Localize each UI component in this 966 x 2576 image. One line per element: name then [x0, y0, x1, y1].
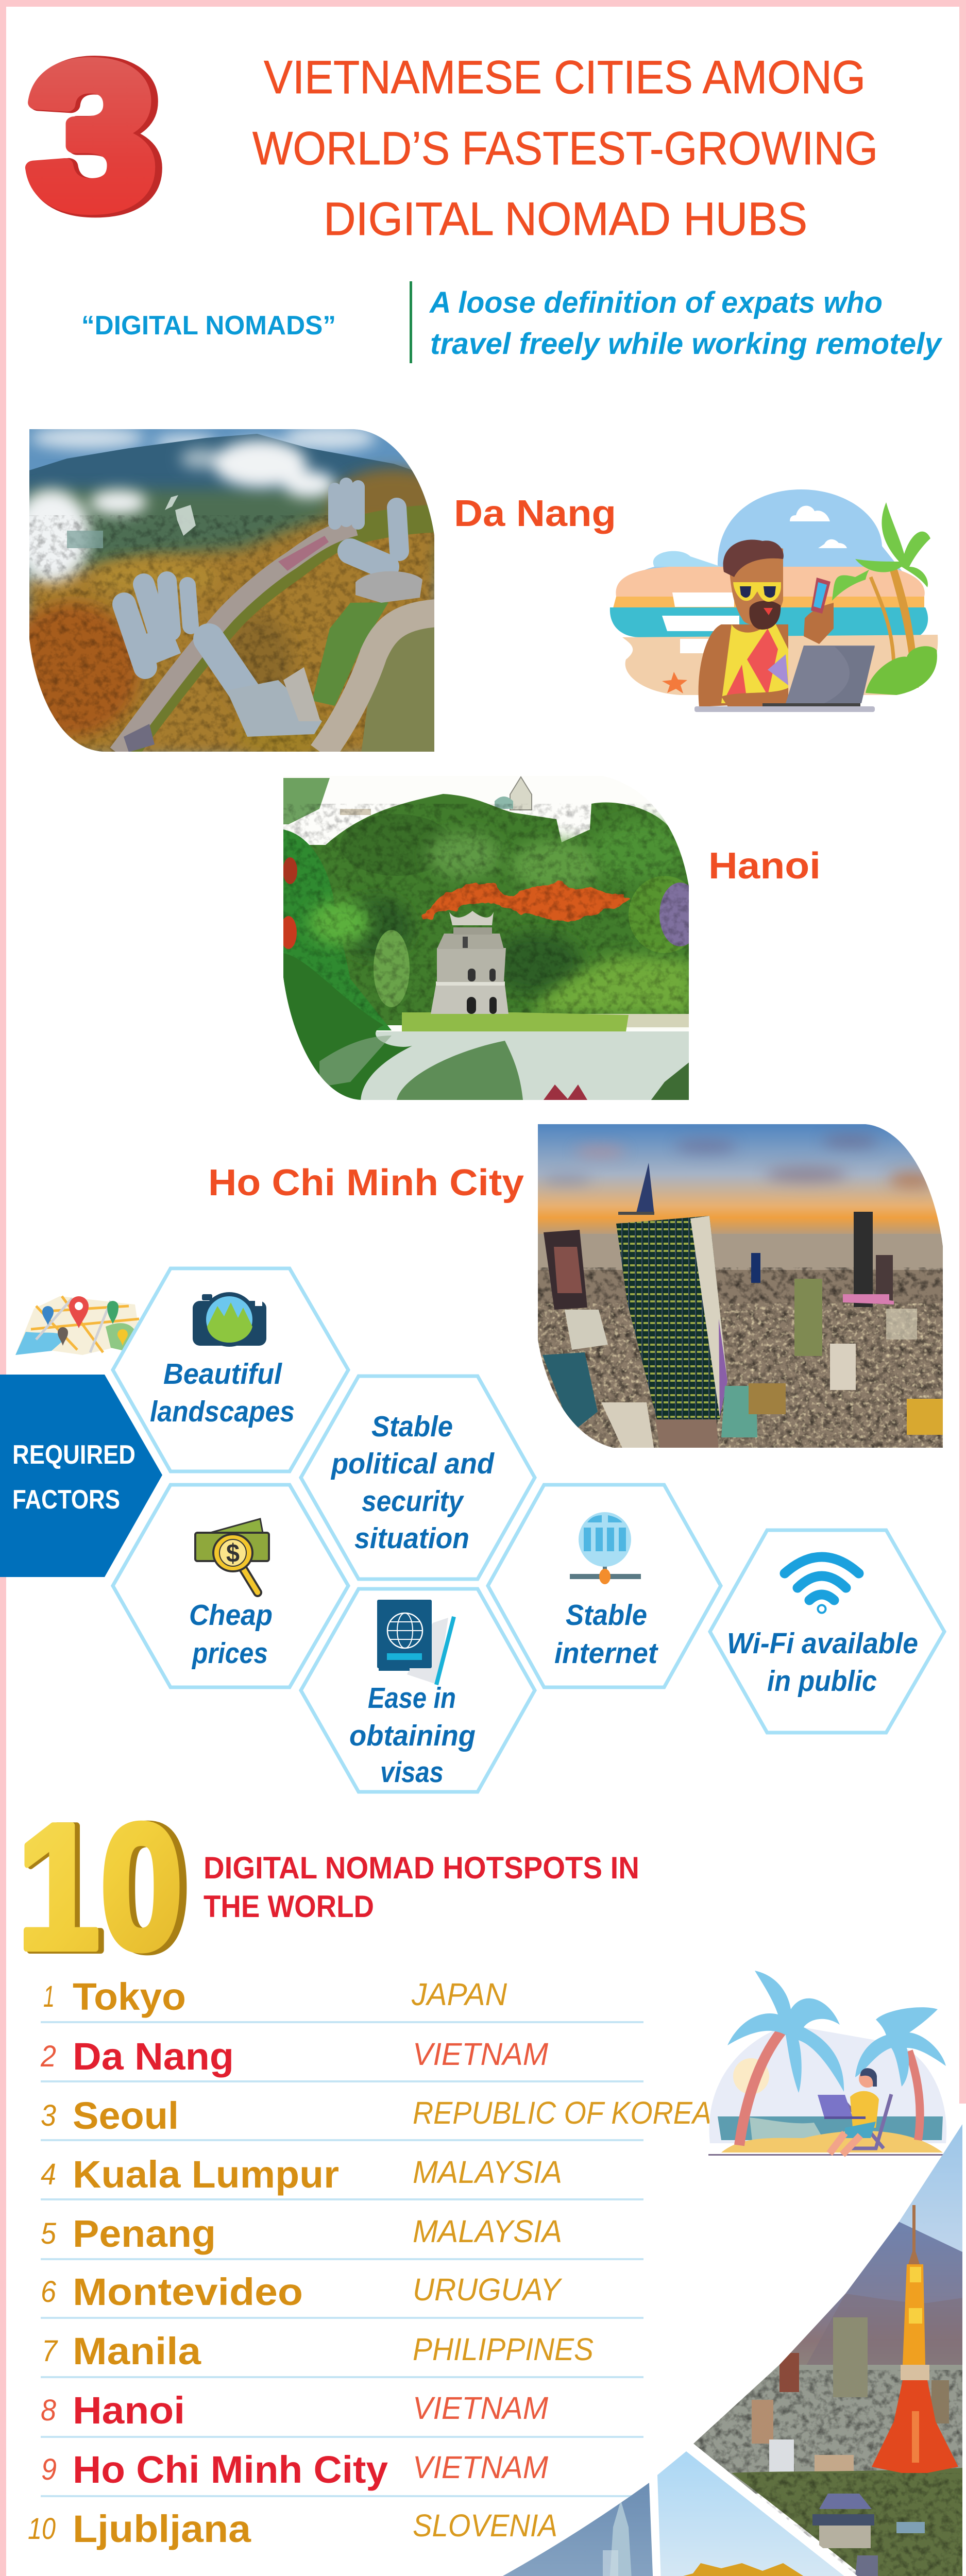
- label: Da Nang: Da Nang: [454, 493, 616, 534]
- row 8: VIETNAM: [413, 2391, 548, 2426]
- row 3: Seoul: [73, 2094, 179, 2137]
- row 6: URUGUAY: [413, 2272, 563, 2307]
- arrow: required factors: REQUIRED: [12, 1440, 135, 1470]
- flame trees: [425, 882, 630, 920]
- row 5: MALAYSIA: [413, 2214, 562, 2249]
- illustration: city map with pins: [15, 1296, 143, 1355]
- hexagon: ease in obtaining visas: obtaining: [349, 1719, 476, 1752]
- photo: Hanoi Turtle Tower: [280, 773, 701, 1104]
- row 10: [28, 2507, 557, 2550]
- photo collage: ten cities: [503, 2124, 962, 2576]
- row 1: Tokyo: [73, 1975, 186, 2018]
- heading: hotspots: DIGITAL NOMAD HOTSPOTS IN: [204, 1851, 639, 1885]
- definition text: travel freely while working remotely: [430, 327, 943, 361]
- man: [699, 540, 834, 708]
- row 4: [41, 2153, 643, 2200]
- illustration: nomad man on beach: [610, 489, 938, 712]
- row 7: PHILIPPINES: [413, 2332, 594, 2367]
- temple: [812, 2494, 925, 2576]
- hexagon: wi-fi available in public: [710, 1530, 944, 1733]
- row 8: 8: [41, 2394, 56, 2427]
- row 4: Kuala Lumpur: [73, 2153, 339, 2196]
- hexagon: wi-fi available in public: Wi-Fi available: [727, 1627, 918, 1660]
- row 1: 1: [43, 1980, 55, 2013]
- arrow: required factors: FACTORS: [12, 1485, 120, 1515]
- hexagon: beautiful landscapes: landscapes: [150, 1395, 295, 1428]
- walkway: [322, 613, 438, 753]
- row 7: [41, 2330, 643, 2378]
- purple tree: [629, 876, 687, 953]
- row 9: [41, 2448, 643, 2497]
- photo: Da Nang dragon bridge: [654, 2447, 938, 2576]
- row 8: Hanoi: [73, 2389, 185, 2432]
- row 9: Ho Chi Minh City: [73, 2448, 388, 2491]
- hexagon: stable internet: Stable: [566, 1599, 647, 1632]
- title: VIETNAMESE CITIES AMONG: [264, 52, 866, 104]
- hexagon: ease in obtaining visas: [301, 1589, 535, 1792]
- illustration: person with laptop under palms: [708, 1971, 946, 2156]
- row 2: VIETNAM: [413, 2037, 548, 2072]
- hexagon: ease in obtaining visas: Ease in: [368, 1682, 456, 1715]
- hexagon: stable political and security situation: Stable: [371, 1410, 453, 1443]
- person: [818, 2068, 891, 2155]
- row 4: MALAYSIA: [413, 2155, 562, 2190]
- hexagon: cheap prices: prices: [191, 1637, 268, 1670]
- row 1: JAPAN: [411, 1977, 507, 2012]
- heading: hotspots: THE WORLD: [204, 1889, 374, 1924]
- hexagon: stable internet: internet: [554, 1637, 658, 1670]
- definition text: A loose definition of expats who: [429, 286, 883, 319]
- icon: money under magnifier: [195, 1519, 269, 1592]
- row 3: 3: [41, 2099, 56, 2132]
- term label: “DIGITAL NOMADS”: [81, 311, 336, 341]
- palm trunks: [739, 2030, 783, 2145]
- green bushes: [531, 956, 693, 1015]
- row 2: 2: [40, 2040, 56, 2073]
- photo: Da Nang Golden Bridge: [5, 426, 438, 757]
- row 10: Ljubljana: [73, 2507, 251, 2550]
- definition block: [81, 281, 943, 363]
- row 3: [41, 2094, 711, 2141]
- hexagon: beautiful landscapes: [113, 1268, 348, 1471]
- row 9: 9: [41, 2453, 57, 2486]
- tower: [431, 911, 509, 1014]
- row 6: [41, 2270, 643, 2319]
- icon: gold number ten: 10: [20, 1787, 190, 1989]
- park: [732, 2468, 963, 2576]
- title: WORLD’S FASTEST-GROWING: [252, 123, 878, 175]
- row 5: 5: [41, 2217, 57, 2250]
- row 2: [40, 2035, 643, 2082]
- palm tree: [832, 502, 930, 688]
- row 1: [41, 1975, 643, 2023]
- hexagon: cheap prices: [113, 1485, 348, 1687]
- map pins: [69, 1296, 89, 1328]
- laptop: [786, 646, 875, 703]
- background trees: [283, 794, 693, 1025]
- row 5: [41, 2212, 643, 2260]
- row 7: 7: [42, 2334, 59, 2368]
- title: DIGITAL NOMAD HUBS: [324, 193, 807, 245]
- hexagon: beautiful landscapes: Beautiful: [163, 1358, 282, 1391]
- row 2: Da Nang: [73, 2035, 234, 2078]
- stone hands: [124, 484, 399, 696]
- row 9: VIETNAM: [413, 2450, 548, 2485]
- title: [252, 52, 878, 245]
- hexagon: stable political and security situation: [301, 1376, 535, 1579]
- definition text: [429, 286, 943, 361]
- row 6: Montevideo: [73, 2270, 303, 2313]
- wall and grass: [584, 1014, 689, 1027]
- hexagon: stable political and security situation: security: [362, 1485, 465, 1518]
- icon: camera: [193, 1292, 266, 1347]
- dragon head: [669, 2563, 870, 2576]
- row 4: 4: [41, 2158, 56, 2191]
- icon: wifi: [785, 1557, 859, 1610]
- palm crowns: [727, 1971, 946, 2093]
- hexagon: stable political and security situation: political and: [330, 1447, 495, 1480]
- row 10: 10: [28, 2512, 56, 2546]
- icon: 3D number three: 3: [28, 22, 156, 248]
- row 10: SLOVENIA: [413, 2508, 557, 2543]
- icon: gold number ten: 10: [17, 1787, 183, 1987]
- row 7: Manila: [73, 2330, 201, 2372]
- hexagon: ease in obtaining visas: visas: [380, 1756, 444, 1789]
- tower: [872, 2205, 958, 2473]
- green meadow: [312, 602, 388, 706]
- photo: Seoul Lotte tower: [392, 2478, 665, 2576]
- row 5: Penang: [73, 2212, 216, 2255]
- icon: passport: [377, 1600, 454, 1685]
- hexagon: cheap prices: Cheap: [189, 1599, 273, 1632]
- sky blob: [634, 489, 907, 577]
- hexagon: stable internet: [488, 1485, 721, 1687]
- heading: hotspots: [204, 1851, 639, 1924]
- photo: Tokyo tower: [690, 2112, 963, 2576]
- label: Ho Chi Minh City: Ho Chi Minh City: [208, 1162, 524, 1204]
- icon: 3D number three: 3: [30, 22, 161, 251]
- hexagon: wi-fi available in public: in public: [767, 1665, 877, 1698]
- row 3: REPUBLIC OF KOREA: [413, 2095, 711, 2130]
- photo: Ho Chi Minh City skyline: [536, 1121, 948, 1455]
- hexagon: stable political and security situation: situation: [354, 1522, 469, 1555]
- row 6: 6: [41, 2275, 57, 2309]
- panel: required factors hexagons: [113, 1268, 944, 1792]
- icon: network globe: [570, 1512, 641, 1584]
- bridge deck: [124, 518, 438, 753]
- label: Hanoi: Hanoi: [708, 845, 821, 887]
- icon: money under magnifier: $: [226, 1539, 240, 1568]
- row 8: [41, 2389, 643, 2438]
- foreground foliage: [283, 953, 412, 1103]
- ranking list: [28, 1975, 711, 2550]
- arrow: required factors: [0, 1375, 162, 1577]
